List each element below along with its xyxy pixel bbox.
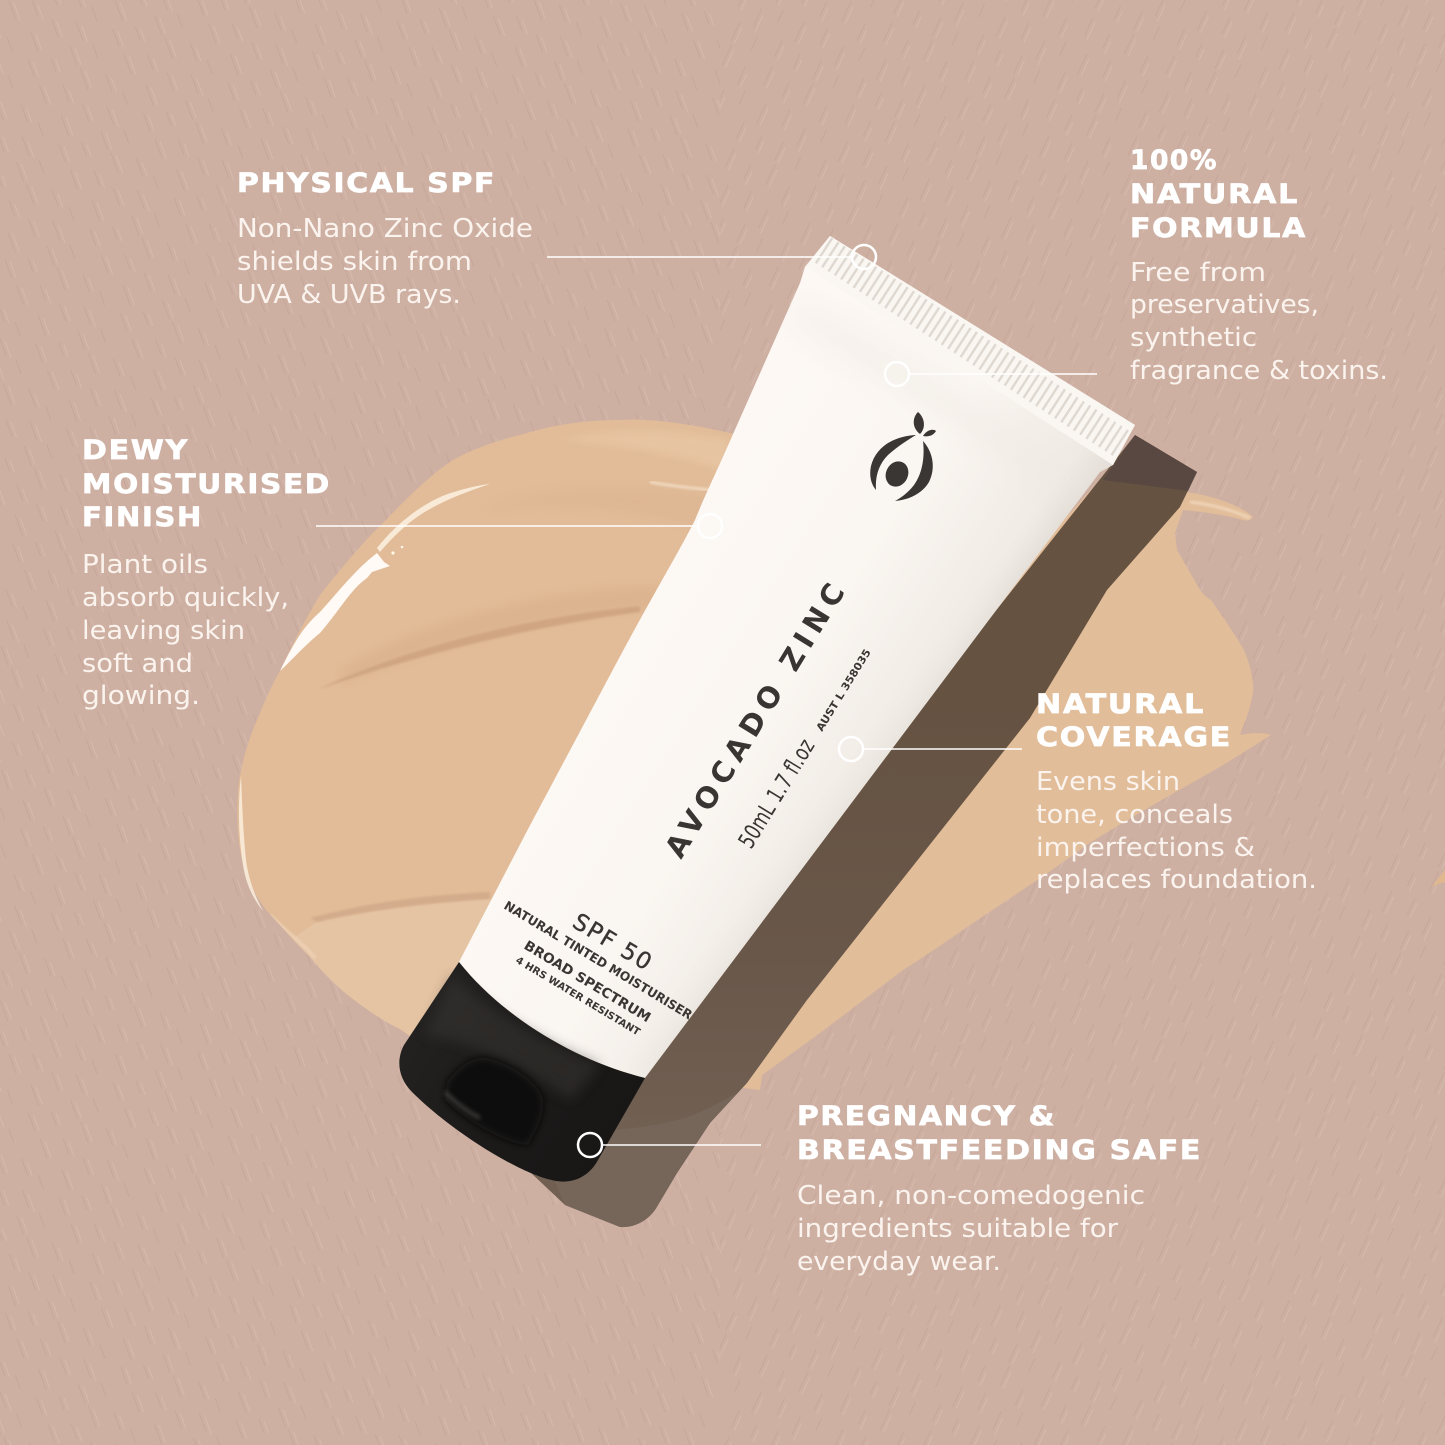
natural formula heading: 100% [1130, 145, 1218, 176]
natural coverage copy [1036, 767, 1317, 895]
callout: dewy moisturised finish [82, 435, 722, 711]
callout: pregnancy and breastfeeding safe [578, 1101, 1202, 1277]
tube: ribbed crimp [805, 236, 1135, 465]
tube: product name: AVOCADO ZINC [658, 577, 852, 864]
tube: SPF rating: SPF 50 [568, 909, 656, 976]
pregnancy safe heading [797, 1101, 1202, 1166]
pregnancy safe connector [578, 1133, 761, 1157]
callout: 100% natural formula [885, 145, 1388, 386]
pregnancy safe heading: BREASTFEEDING SAFE [797, 1135, 1202, 1166]
dewy finish copy: soft and [82, 649, 193, 679]
cream swatch [237, 420, 1445, 1090]
dewy finish copy: Plant oils [82, 550, 208, 580]
dewy finish copy [82, 550, 289, 711]
tube: black cap [399, 962, 645, 1182]
natural coverage copy: replaces foundation. [1036, 865, 1317, 895]
natural formula connector [885, 362, 1097, 386]
physical SPF copy: shields skin from [237, 247, 472, 277]
natural formula heading: FORMULA [1130, 213, 1307, 244]
dewy finish heading [82, 435, 331, 533]
shadow: darker top band [1103, 435, 1197, 491]
tube: water resistance: 4 HRS WATER RESISTANT [513, 955, 642, 1038]
physical SPF heading: PHYSICAL SPF [237, 168, 496, 199]
natural coverage connector [839, 737, 1022, 761]
tube cast shadow [530, 435, 1197, 1227]
shadow: over background [550, 1093, 737, 1227]
callout: physical SPF [237, 168, 876, 310]
natural formula copy [1130, 258, 1388, 386]
tube: licence number: AUST L 358035 [814, 647, 874, 734]
cream: right smear [660, 480, 1271, 1090]
cream: gloss highlight [239, 484, 490, 911]
cream: right edge fleck [1432, 870, 1445, 886]
pregnancy safe copy: everyday wear. [797, 1247, 1001, 1277]
dewy finish copy: glowing. [82, 681, 200, 711]
dewy finish heading: MOISTURISED [82, 469, 331, 500]
pregnancy safe copy [797, 1181, 1145, 1277]
dewy finish copy: leaving skin [82, 616, 245, 646]
dewy finish copy: absorb quickly, [82, 583, 289, 613]
pregnancy safe copy: ingredients suitable for [797, 1214, 1119, 1244]
natural formula copy: fragrance & toxins. [1130, 356, 1388, 386]
tube: size: 50mL 1.7 fl.oz [734, 735, 820, 853]
cream: right streak highlight [1190, 502, 1250, 518]
natural coverage heading: COVERAGE [1036, 722, 1232, 753]
pregnancy safe copy: Clean, non-comedogenic [797, 1181, 1145, 1211]
tube: descriptor: NATURAL TINTED MOISTURISER [501, 898, 695, 1023]
physical SPF copy: Non-Nano Zinc Oxide [237, 214, 533, 244]
dewy finish connector [316, 514, 722, 538]
cream: left smear [237, 420, 800, 1090]
dewy finish heading: DEWY [82, 435, 189, 466]
callout: natural coverage [839, 689, 1317, 895]
tube: broad spectrum: BROAD SPECTRUM [521, 938, 653, 1026]
tube [399, 236, 1135, 1182]
natural coverage heading [1036, 689, 1232, 753]
tube: white body [459, 236, 1135, 1078]
natural formula copy: synthetic [1130, 323, 1257, 353]
natural coverage heading: NATURAL [1036, 689, 1205, 720]
physical SPF copy: UVA & UVB rays. [237, 280, 461, 310]
physical SPF connector [547, 245, 876, 269]
natural coverage copy: Evens skin [1036, 767, 1180, 797]
natural formula heading: NATURAL [1130, 179, 1299, 210]
natural formula copy: Free from [1130, 258, 1266, 288]
physical SPF copy [237, 214, 533, 310]
natural coverage copy: imperfections & [1036, 833, 1255, 863]
natural formula heading [1130, 145, 1307, 244]
natural coverage copy: tone, conceals [1036, 800, 1233, 830]
tube: avocado logo [870, 412, 936, 501]
pregnancy safe heading: PREGNANCY & [797, 1101, 1056, 1132]
shadow: over cream [530, 435, 1197, 1227]
dewy finish heading: FINISH [82, 502, 203, 533]
natural formula copy: preservatives, [1130, 290, 1319, 320]
